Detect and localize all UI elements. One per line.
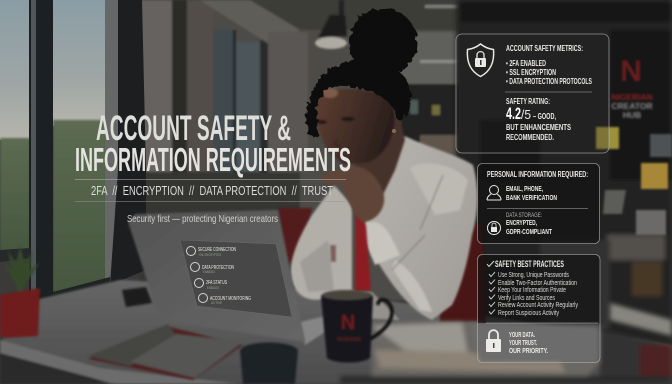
- branded mug: NIGERIAN: [337, 337, 361, 343]
- laptop screen panel: DATA PROTECTION: [202, 265, 234, 271]
- safety rating: RECOMMENDED.: [506, 132, 554, 142]
- tagline: Security first — protecting Nigerian creators: [127, 213, 278, 225]
- metrics heading: ACCOUNT SAFETY METRICS:: [506, 43, 583, 53]
- hand on chin: [320, 166, 384, 222]
- red chair: [278, 208, 486, 322]
- red tie: [355, 208, 371, 292]
- heading: ACCOUNT SAFETY &: [96, 109, 291, 148]
- checklist: Enable Two-Factor Authentication: [498, 280, 577, 287]
- notebook: [88, 324, 243, 380]
- panel: safety best practices: [478, 254, 600, 362]
- pendant lamp: [315, 0, 347, 49]
- laptop screen panel: SECURE CONNECTION: [198, 247, 236, 253]
- laptop screen panel: [180, 240, 292, 317]
- icon: lock in circle: [488, 222, 500, 234]
- checklist: Keep Your Information Private: [498, 287, 566, 294]
- verification text: [506, 184, 557, 202]
- safety rating: [506, 96, 571, 142]
- laptop screen panel: ACCOUNT MONITORING: [210, 296, 251, 302]
- closing message: OUR PRIORITY.: [509, 346, 548, 355]
- metrics list: [506, 58, 592, 86]
- storage text: DATA STORAGE:: [506, 213, 542, 219]
- closing message: [509, 330, 548, 355]
- safety rating: BUT ENHANCEMENTS: [506, 122, 571, 132]
- window: [0, 0, 146, 302]
- phone on desk: [122, 287, 152, 307]
- verification text: EMAIL, PHONE,: [506, 184, 543, 193]
- laptop: [128, 210, 325, 345]
- sign: Nigerian creator hub: NIGERIAN: [611, 92, 653, 102]
- white shirt: [290, 135, 477, 320]
- sign: Nigerian creator hub: [611, 55, 653, 120]
- heading: INFORMATION REQUIREMENTS: [75, 141, 351, 178]
- metrics list: • SSL ENCRYPTION: [506, 67, 556, 77]
- title block: [75, 109, 351, 225]
- sign: Nigerian creator hub: CREATOR: [611, 101, 653, 111]
- branded mug: [321, 290, 392, 362]
- checklist: Verify Links and Sources: [498, 295, 555, 302]
- potted plant: [0, 246, 40, 338]
- icon: padlock: [486, 330, 501, 352]
- closing message: YOUR DATA.: [509, 330, 535, 339]
- laptop screen panel: ACTIVE: [211, 300, 222, 305]
- safety rating: – GOOD,: [533, 111, 556, 121]
- papers and clutter, bottom right: [340, 303, 672, 384]
- desk: [0, 280, 672, 384]
- keyword strip: 2FA // ENCRYPTION // DATA PROTECTION // TRUST: [91, 183, 333, 198]
- storage text: GDPR-COMPLIANT: [506, 227, 552, 236]
- earring: [392, 129, 396, 133]
- checklist: Review Account Activity Regularly: [498, 302, 578, 309]
- icon: user: [487, 186, 501, 200]
- checklist: Use Strong, Unique Passwords: [498, 272, 569, 279]
- branded mug: N: [341, 312, 355, 334]
- safety rating: 4.2: [506, 104, 521, 123]
- panel heading: PERSONAL INFORMATION REQUIRED:: [487, 170, 588, 179]
- closing message: YOUR TRUST.: [509, 338, 537, 347]
- panel: personal information required: [478, 164, 600, 244]
- verification text: BANK VERIFICATION: [506, 193, 557, 202]
- neck and face: [316, 88, 405, 222]
- laptop screen panel: ENABLED: [207, 285, 219, 290]
- panel heading: SAFETY BEST PRACTICES: [495, 259, 564, 269]
- safety rating: /5: [521, 107, 531, 122]
- storage text: ENCRYPTED,: [506, 218, 537, 227]
- checklist: Report Suspicious Activity: [498, 310, 559, 317]
- sign: Nigerian creator hub: HUB: [623, 110, 641, 120]
- panel: account safety metrics: [456, 34, 609, 153]
- sign: Nigerian creator hub: N: [620, 55, 642, 88]
- laptop screen panel: ENABLED: [203, 269, 215, 274]
- storage text: [506, 213, 552, 236]
- safety rating: SAFETY RATING:: [506, 96, 550, 106]
- laptop screen panel: SSL ENCRYPTED: [199, 252, 221, 257]
- checklist: [489, 272, 578, 317]
- metrics list: • 2FA ENABLED: [506, 58, 546, 68]
- woman: [278, 8, 486, 322]
- metrics list: • DATA PROTECTION PROTOCOLS: [506, 76, 592, 86]
- icon: shield with padlock: [467, 44, 494, 76]
- heading: [75, 109, 351, 178]
- dark cup: [240, 342, 298, 384]
- hair: [306, 8, 417, 138]
- laptop screen panel: 2FA STATUS: [206, 280, 227, 286]
